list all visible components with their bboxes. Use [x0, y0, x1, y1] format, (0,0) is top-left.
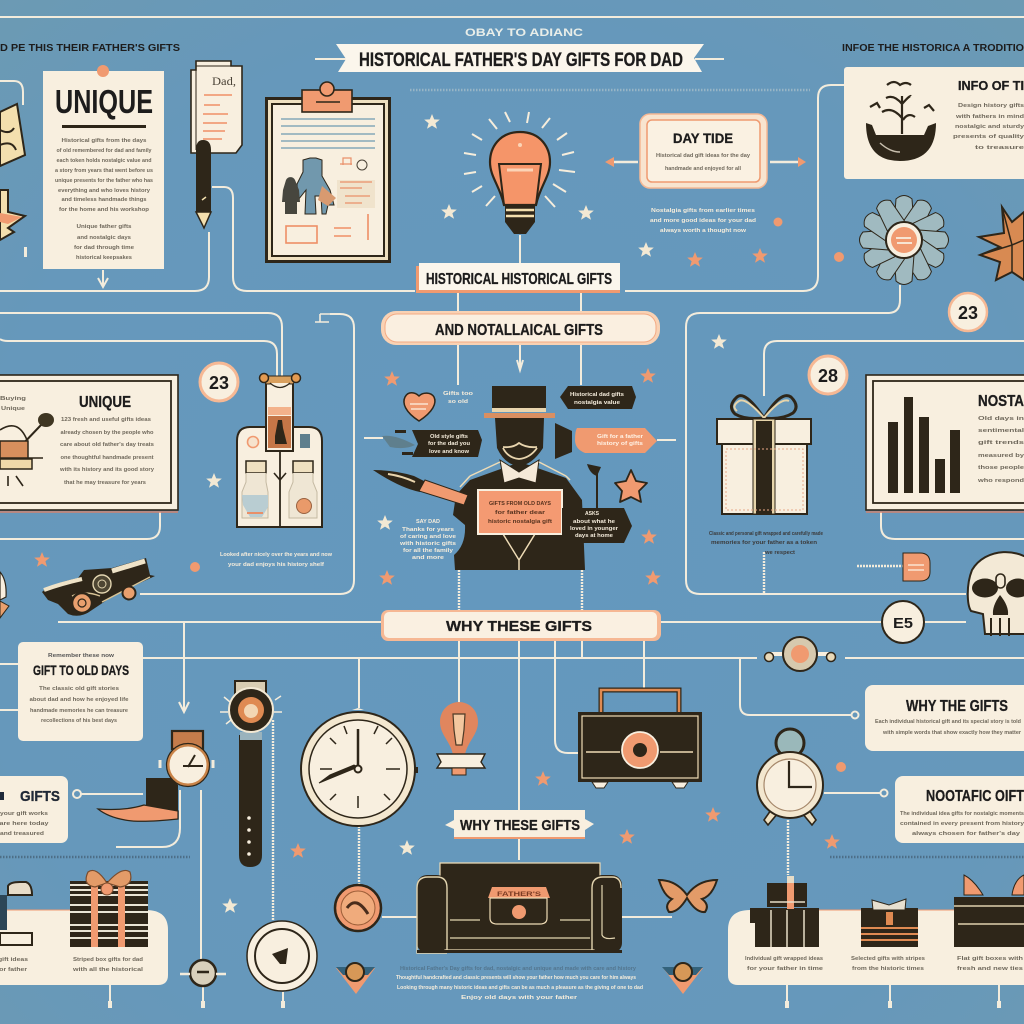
tick ends [108, 1001, 1001, 1008]
chart text: Old days in [978, 416, 1024, 422]
poster body text: historical keepsakes [76, 255, 132, 261]
panel text: to treasure [975, 145, 1024, 151]
icon: striped gift [70, 870, 148, 947]
tag: lower right dark label with plant: loved in younger [570, 526, 619, 532]
body: The individual idea gifts for nostalgic moments [900, 811, 1024, 817]
panel: bottom left gifts [0, 870, 168, 985]
captions: Flat gift boxes with [957, 956, 1024, 962]
body: are here today [0, 821, 50, 827]
poster body text: a story from years that went before us [55, 168, 153, 174]
poster body text: for the home and his workshop [59, 207, 150, 213]
poster body text: each token holds nostalgic value and [56, 158, 152, 164]
subtitle: OBAY TO ADIANC [465, 27, 583, 39]
hanging tag [260, 374, 300, 451]
caption: lower left: for all the family [403, 548, 454, 554]
captions [0, 957, 144, 973]
chest sign [478, 490, 562, 534]
poster body text [55, 138, 153, 261]
icon: orange tag [903, 553, 930, 581]
arrow: right [770, 157, 806, 167]
caption under sofa: Looking through many historic ideas and gifts can be as much a pleasure as the giving of one to dad [397, 985, 644, 991]
panel text: nostalgic and sturdy [955, 124, 1024, 130]
star and dot set [222, 762, 846, 913]
body: always chosen for father's day [912, 831, 1021, 837]
panel heading: INFO OF TI [958, 78, 1024, 93]
icon: parcel [0, 190, 25, 240]
card body: Historical dad gift ideas for the day [656, 153, 751, 159]
icon: light bulb [464, 112, 575, 234]
panel: unique poster [43, 65, 164, 269]
tag: left dark label: Old style gifts [430, 434, 468, 440]
caption under sofa: Thoughtful handcrafted and classic presents will show your father how much you care for him always [396, 975, 636, 981]
tag: top right dark label: Historical dad gifts [570, 392, 624, 398]
chart text: measured by [978, 453, 1024, 459]
body: The classic old gift stories [39, 686, 119, 692]
tag: left dark label: for the dad you [428, 441, 471, 447]
icon: skull [968, 552, 1024, 636]
caption: lower left: SAY DAD [416, 519, 440, 525]
body text: already chosen by the people who [60, 430, 154, 436]
clipboard [265, 82, 391, 263]
body: recollections of his best days [41, 718, 117, 724]
chart text: who respond [977, 478, 1024, 484]
caption under bottles [220, 552, 333, 568]
tag: orange label with funnel [555, 423, 676, 459]
caption under card: Nostalgia gifts from earlier times [651, 208, 755, 214]
small label: Buying [0, 396, 27, 402]
tag: left dark label [412, 430, 482, 457]
icon: bronze coin [335, 885, 381, 931]
caption under bottles: your dad enjoys his history shelf [228, 562, 324, 568]
icon: compass dial [247, 921, 317, 991]
badge: 23 left: 23 [209, 373, 229, 393]
badge: 23 left [200, 363, 238, 401]
decorative stars and dots [578, 205, 844, 267]
father and child illustration [282, 158, 375, 214]
caption: lower left: and more [412, 555, 444, 561]
small label: Unique [1, 406, 25, 412]
panel: gift to old days [18, 642, 143, 741]
badge: 28: 28 [818, 366, 838, 386]
caption: above left: Gifts too [443, 391, 474, 397]
banner: nostalgic gifts pill: AND NOTALLAICAL GIFTS [435, 322, 603, 339]
captions: Striped box gifts for dad [73, 957, 144, 963]
captions: Selected gifts with stripes [851, 956, 925, 962]
body: about dad and how he enjoyed life [30, 697, 128, 703]
heading: GIFTS [20, 788, 60, 805]
caption: lower left: of caring and love [400, 534, 456, 540]
badge: E5 [882, 601, 924, 643]
body text: that he may treasure for years [64, 480, 146, 486]
icon: old map [0, 104, 25, 166]
title banner: HISTORICAL FATHER'S DAY GIFTS FOR DAD [359, 50, 683, 71]
body: with simple words that show exactly how they matter [882, 730, 1022, 736]
small label [0, 396, 27, 412]
arrow: left [605, 157, 638, 167]
icon: skull fragment left [0, 572, 9, 618]
caption: lower left: Thanks for years [402, 527, 454, 533]
heading: UNIQUE [79, 394, 131, 411]
icon: alarm clock [757, 729, 823, 825]
icon: large wall clock [301, 708, 418, 826]
icon: shower fixture [315, 314, 330, 322]
icon: vintage car [42, 558, 155, 616]
gift caption: we respect [764, 550, 795, 556]
panel text: Design history gifts [958, 103, 1024, 109]
icon: left swoosh [364, 430, 415, 455]
panel: bottom right gifts [728, 875, 1024, 985]
panel text [953, 103, 1024, 151]
banner: nostalgic gifts pill [381, 311, 660, 345]
bottle right [289, 461, 317, 518]
body [0, 811, 50, 837]
chest sign: for father dear [495, 510, 546, 516]
captions: for your father in time [747, 966, 823, 972]
banner: historical gifts [416, 263, 620, 293]
icon: medal with ribbon [437, 702, 485, 775]
body: handmade memories he can treasure [30, 708, 128, 714]
caption: lower left [399, 519, 456, 561]
icon: vintage car machine [0, 413, 54, 486]
tag: lower right dark label with plant [562, 464, 632, 543]
caption under sofa: Enjoy old days with your father [461, 995, 578, 1001]
panel: unique left [0, 375, 178, 513]
top left caption: D PE THIS THEIR FATHER'S GIFTS [0, 43, 180, 54]
card body [656, 153, 751, 172]
card body: handmade and enjoyed for all [665, 166, 741, 172]
gift caption [709, 531, 823, 556]
title banner [336, 44, 704, 72]
icon: long strap watch [220, 681, 282, 867]
bulb rays [464, 112, 575, 207]
caption under card: always worth a thought now [660, 228, 747, 234]
tag: orange label with funnel: Gift for a father [597, 434, 644, 440]
body: and treasured [0, 831, 45, 837]
caption: above left: so old [448, 399, 469, 405]
card heading: DAY TIDE [673, 131, 733, 146]
captions: Individual gift wrapped ideas [745, 956, 823, 962]
body [875, 719, 1022, 736]
poster body text: and timeless handmade things [62, 197, 146, 203]
icon: clasp medallion [764, 637, 836, 671]
gift caption: Classic and personal gift wrapped and carefully made [709, 531, 823, 537]
chart text: those people [978, 465, 1024, 471]
poster heading: UNIQUE [55, 83, 153, 120]
gift caption: memories for your father as a token [711, 540, 818, 546]
body: contained in every present from history [900, 821, 1024, 827]
poster body text: for dad through time [74, 245, 134, 251]
caption under bottles: Looked after nicely over the years and now [220, 552, 333, 558]
icon: sofa [417, 863, 622, 953]
caption: above left [443, 391, 474, 405]
caption under sofa [396, 966, 644, 1001]
tag: lower right dark label with plant: about what he [573, 519, 615, 525]
clipboard clip [302, 82, 352, 112]
top right caption: INFOE THE HISTORICA A TRODITIO [842, 43, 1024, 54]
icon: butterfly [659, 880, 717, 912]
chart text: gift trends [978, 440, 1024, 446]
sofa label [488, 887, 550, 924]
badge: 23 [949, 293, 987, 331]
panel: nostalgic gifts [895, 776, 1024, 843]
panel: day time card [640, 114, 767, 188]
body [30, 686, 128, 724]
body text: one thoughtful handmade present [60, 455, 154, 461]
icon: small emblem left [336, 963, 375, 994]
star [711, 334, 727, 349]
caption: lower left: with historic gifts [399, 541, 456, 547]
banner: why these gifts pill [381, 610, 661, 641]
poster body text: of old remembered for dad and family [56, 148, 152, 154]
poster body text: unique presents for the father who has [55, 178, 153, 184]
bar chart [888, 397, 960, 493]
icon: flat box [954, 875, 1024, 947]
panel: top right story [844, 67, 1024, 179]
caption under card [650, 208, 757, 234]
connector node [73, 790, 81, 798]
poster body text: Historical gifts from the days [62, 138, 146, 144]
poster body text: everything and who loves history [58, 188, 151, 194]
icon: gift stack [750, 876, 819, 947]
banner: why these gifts pill: WHY THESE GIFTS [446, 618, 592, 635]
body: your gift works [0, 811, 48, 817]
chest sign: historic nostalgia gift [488, 519, 552, 525]
icon: fountain pen [373, 470, 468, 505]
panel: gift to old days: Remember these now [48, 653, 115, 659]
panel text: presents of quality [953, 134, 1024, 140]
icon: star bow [979, 207, 1024, 280]
icon: note pad [191, 61, 242, 153]
poster body text: and nostalgic days [77, 235, 131, 241]
panel: gifts left [0, 776, 68, 843]
figure: father with top hat [453, 386, 585, 570]
icon: striped box [861, 899, 918, 947]
captions: with all the historical [72, 967, 144, 973]
bottles panel [237, 374, 322, 527]
icon: outlined star [615, 470, 647, 502]
note text: Dad, [212, 74, 236, 88]
body [900, 811, 1024, 837]
tag: top right dark label [560, 386, 636, 409]
captions: fresh and new ties [957, 966, 1023, 972]
tag: top right dark label: nostalgia value [574, 400, 620, 406]
icon: heart badge [404, 393, 435, 421]
panel: nostalgic chart [866, 375, 1024, 513]
star [424, 114, 440, 129]
shirt collar [500, 460, 539, 483]
chest sign: GIFTS FROM OLD DAYS [489, 501, 551, 507]
icon: rosette flower [860, 196, 948, 284]
badge: 23: 23 [958, 303, 978, 323]
poster body text: Unique father gifts [76, 224, 132, 230]
icon: small emblem right [662, 963, 703, 994]
tag: orange label with funnel: history of gifts [597, 441, 643, 447]
banner: historical gifts: HISTORICAL HISTORICAL GIFTS [426, 271, 612, 288]
body text: care about old father's day treats [60, 442, 154, 448]
badge: E5: E5 [893, 615, 913, 632]
panel: why the gifts [865, 685, 1024, 751]
icon: small gauge [180, 960, 226, 986]
caption under sofa: Historical Father's Day gifts for dad, nostalgic and unique and made with care and history [400, 966, 637, 972]
chart text [977, 416, 1024, 484]
icon: pen [196, 140, 211, 228]
icon: wrist watch with shoe [98, 731, 213, 821]
tag: lower right dark label with plant: ASKS [585, 511, 599, 517]
chart text: sentimental [978, 428, 1024, 434]
body: Each individual historical gift and its special story is told [875, 719, 1022, 725]
captions [745, 956, 1024, 972]
icon: gift box [717, 396, 811, 514]
caption under card: and more good ideas for your dad [650, 218, 757, 224]
tag: why these gifts [445, 810, 594, 839]
badge: 28 [809, 356, 847, 394]
captions: from the historic times [852, 966, 924, 972]
tag: lower right dark label with plant: days at home [575, 533, 613, 539]
body text: with its history and its good story [59, 467, 155, 473]
icon: briefcase [578, 690, 702, 788]
central stars [377, 368, 661, 585]
star [441, 204, 457, 219]
left decorations [34, 473, 222, 572]
tag: why these gifts: WHY THESE GIFTS [460, 817, 580, 834]
icon: lamp fragment [0, 882, 32, 945]
body text: 123 fresh and useful gifts ideas [61, 417, 151, 423]
tag: left dark label: love and know [429, 449, 470, 455]
heading: GIFT TO OLD DAYS [33, 663, 129, 678]
bottle left [242, 461, 268, 518]
sofa label: FATHER'S [497, 892, 541, 898]
body text [59, 417, 155, 486]
icon: tree in bowl [866, 82, 936, 161]
panel text: with fathers in mind [955, 114, 1024, 120]
